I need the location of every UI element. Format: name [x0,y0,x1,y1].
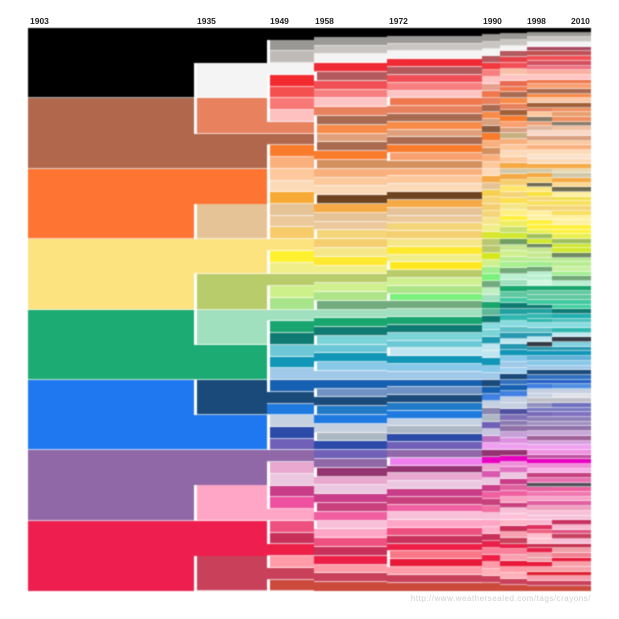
column: 1903, 8 colours [27,27,195,592]
year label 1972: 1972 [389,16,408,26]
year label 1998: 1998 [527,16,546,26]
year label 1990: 1990 [483,16,502,26]
year label 1958: 1958 [315,16,334,26]
source URL: http://www.weathersealed.com/tags/crayons/ [411,594,591,603]
column: 1949, 48 colours [266,27,315,592]
column: 1972, 72 colours [386,27,483,592]
column: 1935, 16 colours [193,27,268,592]
column: 2010, 120 colours [551,27,592,592]
column: intermediate release, 96 colours [499,27,528,592]
column: 1958, 64 colours [313,27,388,592]
column: 1998, 120 colours [526,27,553,592]
year label 1903: 1903 [30,16,49,26]
year label 2010: 2010 [571,16,590,26]
year label 1935: 1935 [197,16,216,26]
year label 1949: 1949 [270,16,289,26]
column: 1990, 80 colours [481,27,501,592]
